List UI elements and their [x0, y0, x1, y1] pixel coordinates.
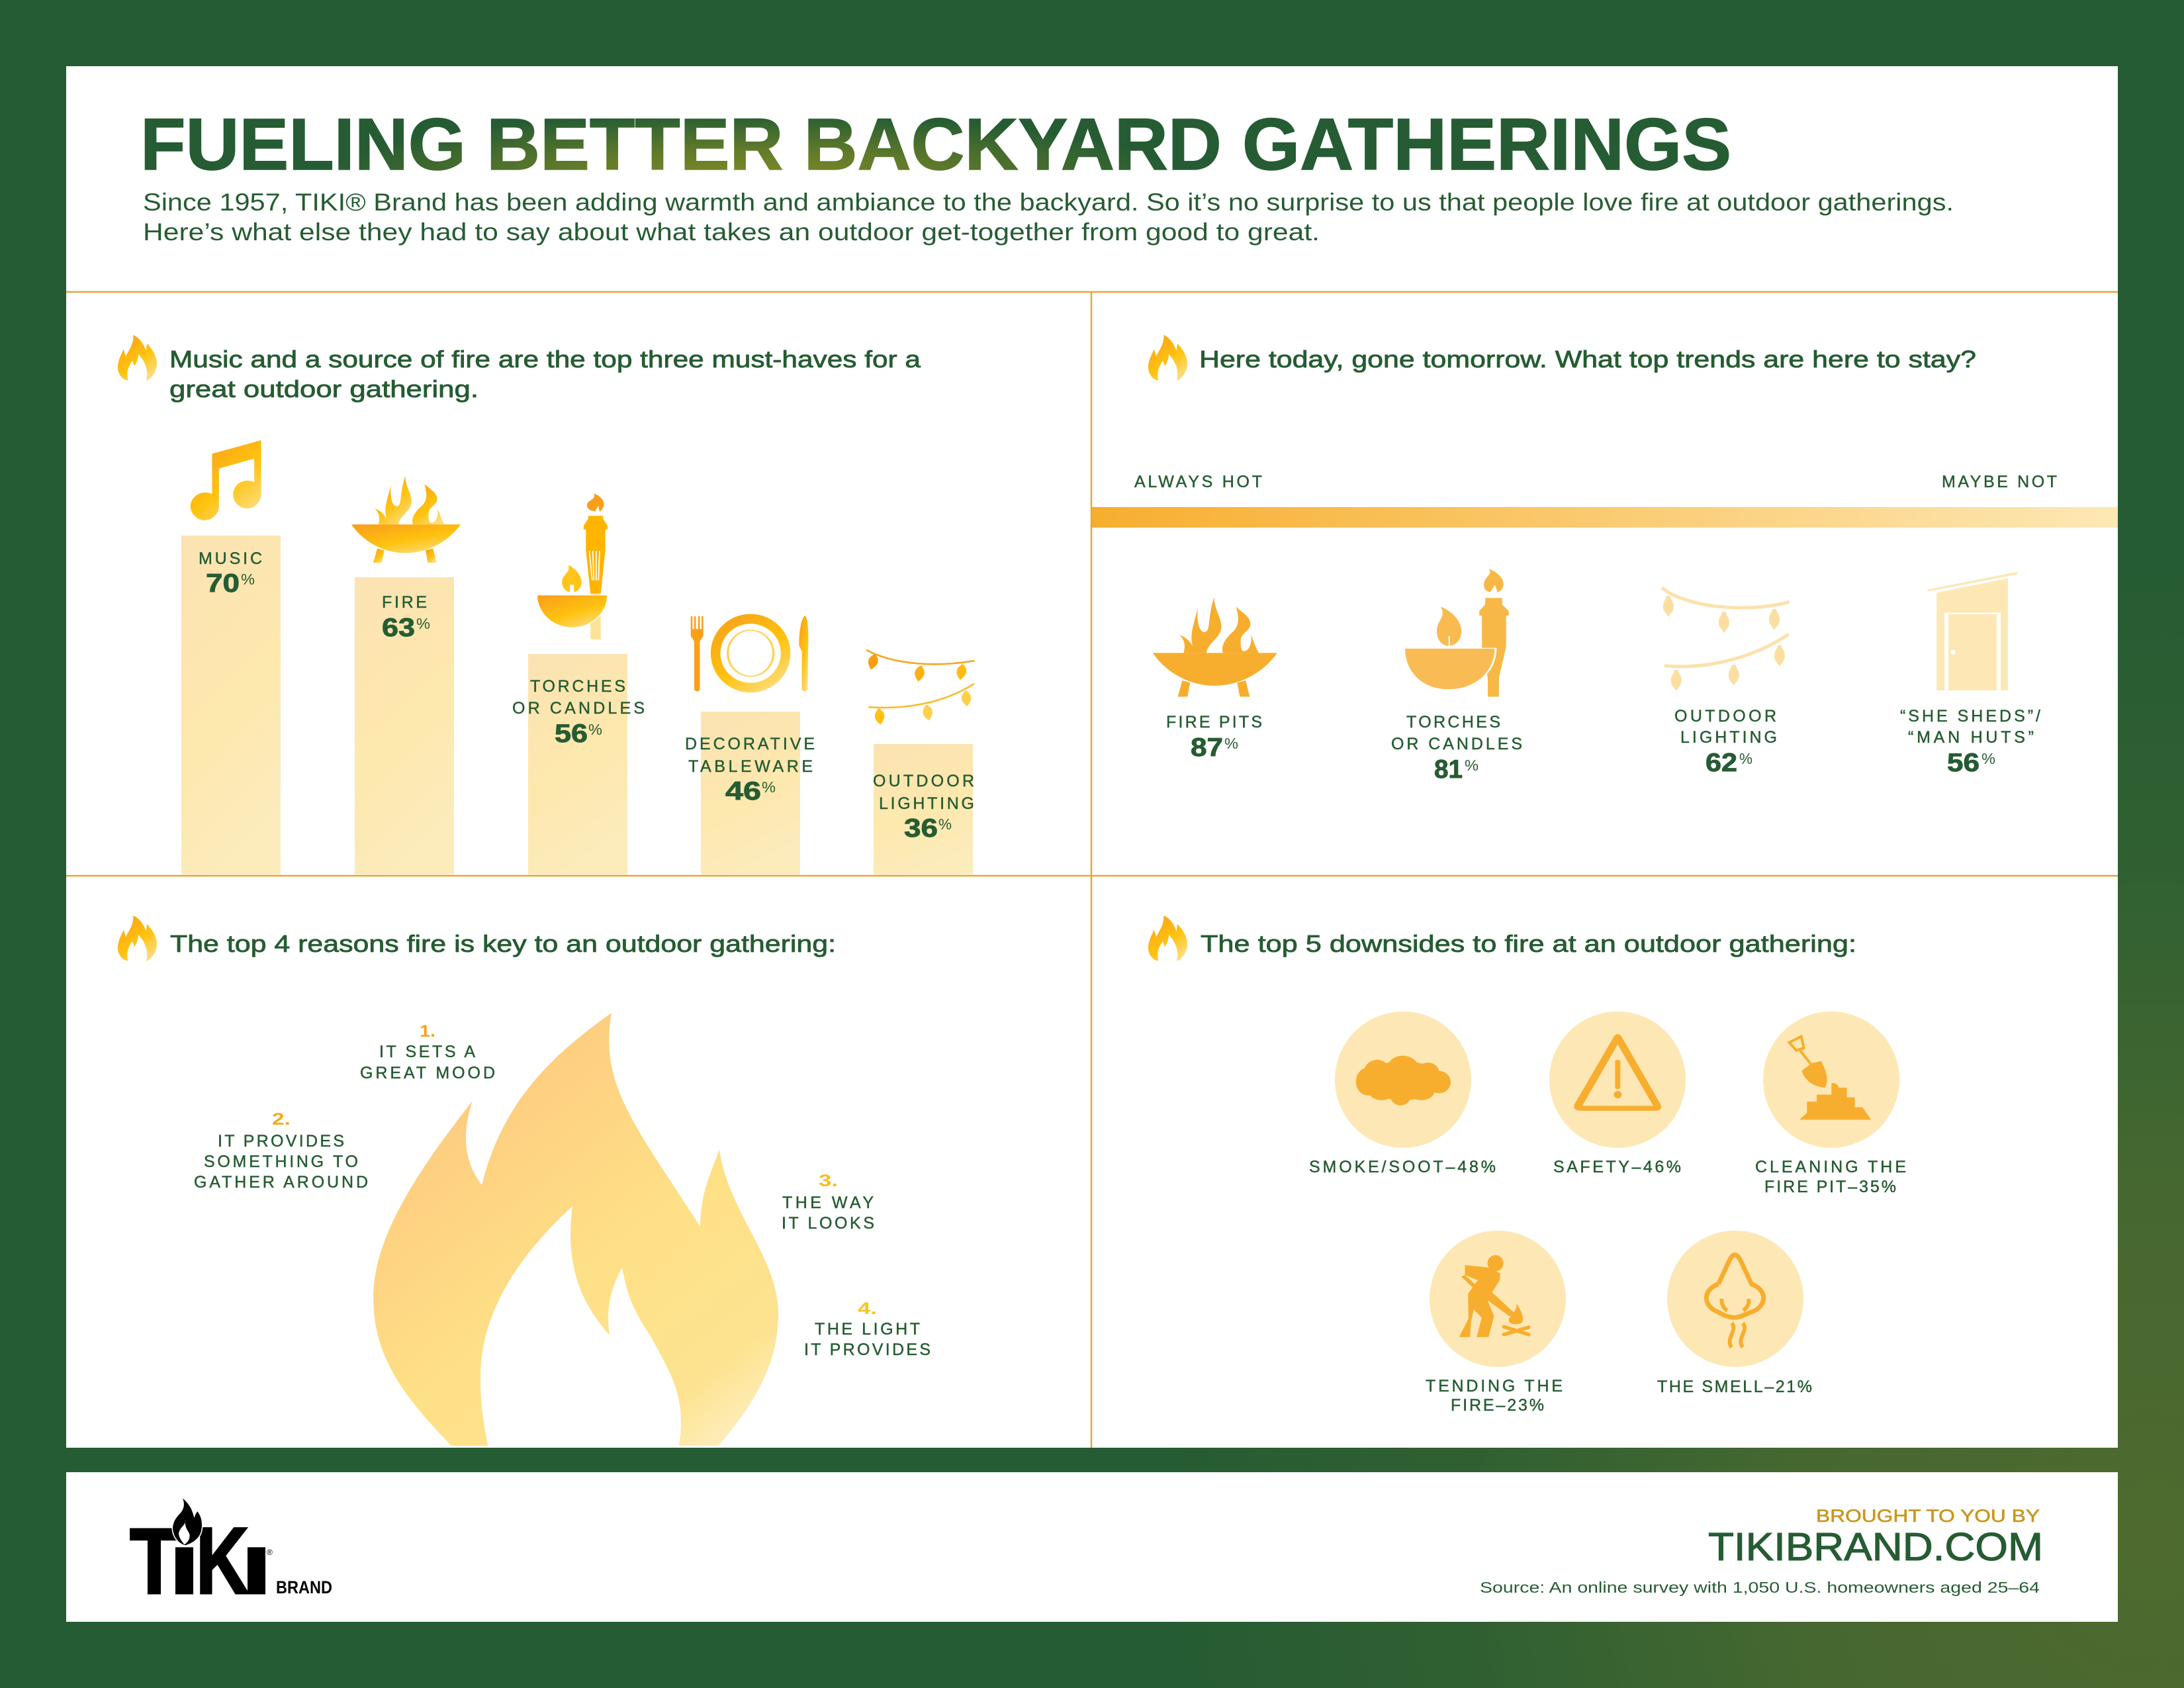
credit text: TIKIBRAND.COM: [1708, 1525, 2043, 1569]
bar: outdoor lighting: 36: [904, 814, 938, 843]
reason 1: GREAT MOOD: [360, 1064, 495, 1082]
heading icon: flame: [1148, 335, 1187, 380]
trend: torches or candles: [1391, 569, 1522, 784]
reason 2: IT PROVIDES: [218, 1132, 344, 1150]
intro text: Since 1957, TIKI® Brand has been adding warmth and ambiance to the backyard. So it’s no surprise to us that people love fire at outdoor gatherings.: [143, 189, 1954, 216]
footer: [130, 1498, 2043, 1614]
scale label: always hot: ALWAYS HOT: [1134, 473, 1262, 491]
heading icon: flame: [118, 335, 157, 380]
scale label: maybe not: MAYBE NOT: [1942, 473, 2057, 491]
trend: she sheds: “SHE SHEDS”/: [1900, 707, 2040, 726]
downside: safety: SAFETY–46%: [1553, 1158, 1681, 1176]
bar: fire: [355, 577, 454, 875]
bar: music: 70: [206, 569, 240, 598]
reason 1: IT SETS A: [379, 1043, 475, 1061]
icon: plate and cutlery: [691, 614, 808, 692]
bar: outdoor lighting: %: [938, 816, 952, 833]
heading icon: flame: [118, 915, 157, 961]
bar: outdoor lighting: [873, 744, 974, 875]
reason 1: [360, 1022, 495, 1082]
reason 4: IT PROVIDES: [804, 1340, 931, 1359]
logo: TIKI brand: I: [242, 1534, 271, 1607]
downside: smoke: [1309, 1011, 1496, 1176]
panel: reasons: [118, 915, 931, 1448]
bar chart: [181, 536, 974, 875]
downside: smell: [1657, 1231, 1812, 1396]
trend: fire pits: 87: [1191, 733, 1223, 762]
panel: must-haves: [118, 335, 974, 875]
downside: smell: THE SMELL–21%: [1657, 1378, 1812, 1396]
downside: safety: [1549, 1011, 1686, 1176]
trend scale bar: [1092, 507, 2118, 528]
bar: fire: %: [416, 615, 430, 632]
title: FUELING BETTER BACKYARD GATHERINGS: [140, 104, 1731, 185]
downside: tending: FIRE–23%: [1451, 1396, 1544, 1415]
reason 3: THE WAY: [782, 1194, 874, 1212]
bar: music: %: [241, 571, 255, 588]
heading: must-haves: great outdoor gathering.: [169, 375, 478, 402]
icon: string lights: [866, 650, 974, 725]
panel: downsides: [1148, 915, 1906, 1415]
reason 2: GATHER AROUND: [194, 1173, 368, 1192]
panel: trends: [1092, 335, 2118, 784]
bar: torches or candles: TORCHES: [530, 677, 625, 696]
bar: fire: FIRE: [382, 593, 427, 612]
bar: fire: 63: [382, 614, 415, 642]
logo: TIKI brand: [130, 1498, 332, 1614]
bar: torches or candles: %: [588, 721, 602, 738]
heading: must-haves: Music and a source of fire are the top three must-haves for a: [169, 346, 921, 373]
credit text: Source: An online survey with 1,050 U.S. homeowners aged 25–64: [1480, 1579, 2040, 1596]
reason 4: 4.: [858, 1299, 877, 1318]
bar: torches or candles: [512, 654, 645, 875]
downside: tending: TENDING THE: [1426, 1377, 1563, 1395]
icon: fire bowl: [351, 475, 461, 563]
trend: she sheds: “MAN HUTS”: [1908, 728, 2034, 747]
bar: decorative tableware: %: [762, 778, 776, 796]
trend: outdoor lighting: OUTDOOR: [1674, 707, 1776, 726]
main white panel: [66, 66, 2118, 1448]
trend: outdoor lighting: %: [1739, 750, 1752, 767]
trend: torches or candles: TORCHES: [1406, 713, 1500, 731]
logo: TIKI brand: K: [196, 1509, 249, 1614]
reason 1: 1.: [420, 1022, 435, 1041]
bar: decorative tableware: DECORATIVE: [685, 735, 815, 753]
trend: torches or candles: %: [1465, 757, 1479, 774]
downside: smoke: SMOKE/SOOT–48%: [1309, 1158, 1496, 1176]
trend: fire pits: [1153, 596, 1277, 762]
reason 2: 2.: [272, 1110, 291, 1129]
trend: outdoor lighting: [1662, 588, 1790, 777]
reason 4: THE LIGHT: [815, 1320, 920, 1338]
downside: cleaning: FIRE PIT–35%: [1764, 1178, 1896, 1196]
footer panel background: [66, 1472, 2118, 1622]
bar: outdoor lighting: OUTDOOR: [873, 772, 974, 790]
bar: torches or candles: OR CANDLES: [512, 699, 645, 718]
large flame: [373, 1013, 778, 1448]
trend: torches or candles: 81: [1434, 755, 1463, 784]
reason 3: [782, 1172, 874, 1233]
reason 2: [194, 1110, 368, 1192]
icon: torch and candle: [537, 493, 608, 639]
reason 4: [804, 1299, 931, 1359]
heading: reasons: The top 4 reasons fire is key to an outdoor gathering:: [170, 930, 836, 957]
bar: music: MUSIC: [199, 549, 262, 568]
trend: outdoor lighting: LIGHTING: [1680, 728, 1777, 747]
trend: torches or candles: OR CANDLES: [1391, 735, 1522, 753]
heading: must-haves: [169, 346, 921, 402]
downside: tending: [1426, 1231, 1566, 1415]
trend: she sheds: 56: [1947, 749, 1979, 777]
heading: downsides: The top 5 downsides to fire at an outdoor gathering:: [1201, 930, 1856, 957]
reason 2: SOMETHING TO: [204, 1152, 358, 1171]
trend: she sheds: [1900, 572, 2040, 777]
trend: outdoor lighting: 62: [1706, 749, 1737, 777]
logo: TIKI brand: I: [170, 1534, 199, 1607]
bar: decorative tableware: [685, 712, 815, 875]
credit text: BROUGHT TO YOU BY: [1816, 1506, 2040, 1526]
trend: fire pits: %: [1224, 735, 1238, 752]
bar: decorative tableware: 46: [725, 777, 761, 806]
logo: TIKI brand: BRAND: [276, 1577, 332, 1597]
credit text: [1480, 1506, 2043, 1596]
reason 3: IT LOOKS: [782, 1214, 874, 1233]
trend: she sheds: %: [1981, 750, 1995, 767]
bar: music: [181, 536, 281, 875]
bar: decorative tableware: TABLEWARE: [688, 757, 813, 776]
logo: TIKI brand: T: [130, 1509, 179, 1613]
bar: outdoor lighting: LIGHTING: [879, 794, 974, 813]
intro text: [143, 189, 1954, 246]
intro text: Here’s what else they had to say about what takes an outdoor get-together from good to great.: [143, 218, 1320, 246]
heading icon: flame: [1148, 915, 1187, 961]
reason 3: 3.: [819, 1172, 838, 1190]
bar: torches or candles: 56: [555, 720, 588, 748]
trend: fire pits: FIRE PITS: [1166, 713, 1262, 731]
downside: cleaning: [1755, 1011, 1906, 1196]
icon: music note: [191, 440, 261, 520]
heading: trends: Here today, gone tomorrow. What top trends are here to stay?: [1199, 346, 1976, 373]
logo: TIKI brand: ®: [267, 1548, 273, 1557]
downside: cleaning: CLEANING THE: [1755, 1158, 1906, 1176]
